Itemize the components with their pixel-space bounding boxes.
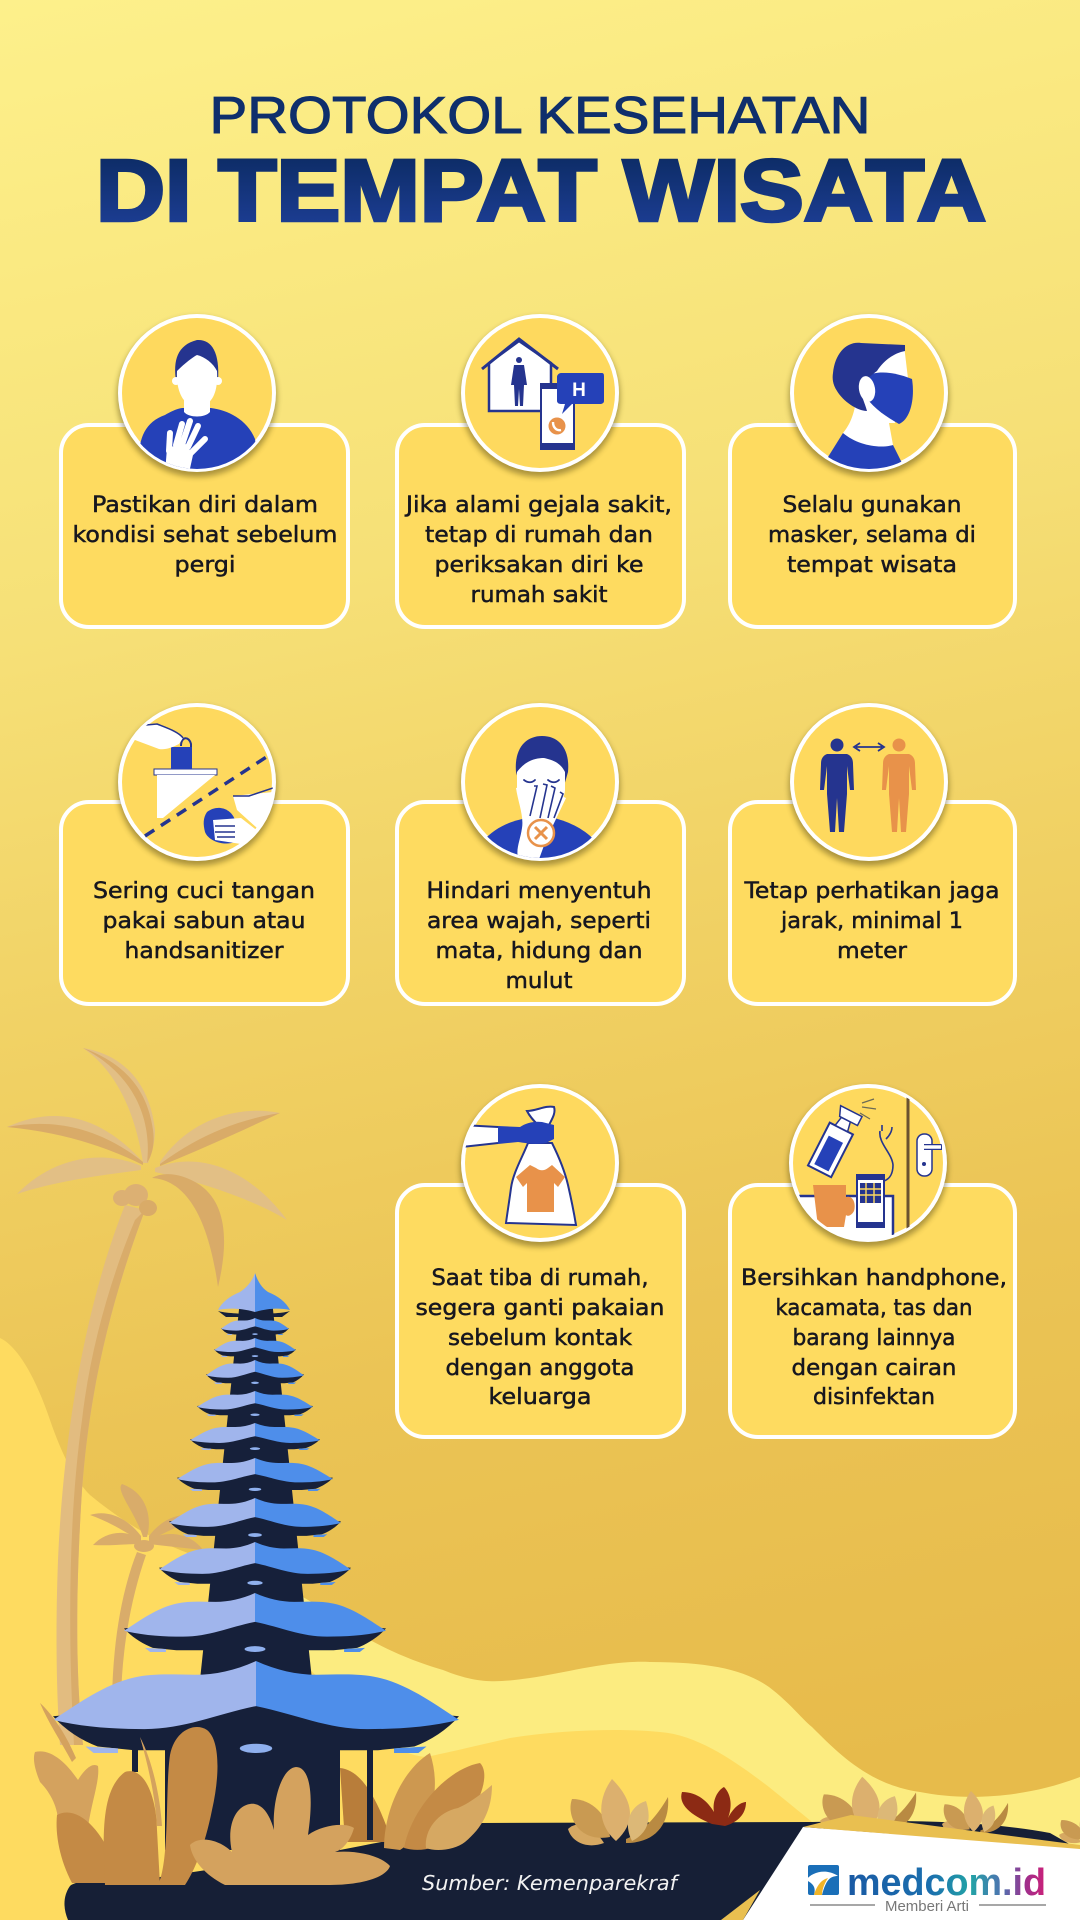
text: segera ganti pakaian [416,1296,664,1321]
small palm tree [90,1484,203,1700]
text: Saat tiba di rumah, [432,1266,648,1291]
icon: house, phone, hospital: H [572,380,586,401]
card [61,425,348,627]
icon: two people distance [789,703,949,866]
text: keluarga [488,1385,592,1410]
tagline: Memberi Arti [885,1898,969,1915]
card [397,425,684,627]
text: Selalu gunakan [782,493,962,518]
temple base [165,1745,340,1850]
text: tetap di rumah dan [425,523,653,548]
big palm tree [7,1048,287,1745]
panel: sehat [61,314,348,627]
text: pakai sabun atau [102,909,306,934]
card [397,1185,684,1437]
text: periksakan diri ke [434,553,644,578]
panel: disinfektan [730,1084,1015,1437]
source text: Sumber: Kemenparekraf [422,1871,680,1895]
text [404,493,672,608]
icon: clothes in bag [460,1084,620,1247]
card [730,802,1015,1004]
icon: head with mask [789,314,949,477]
text: disinfektan [813,1385,935,1410]
text: Sering cuci tangan [93,879,315,904]
logo icon [806,1865,839,1895]
ground and shrubs right [64,1753,1080,1920]
text: Pastikan diri dalam [92,493,318,518]
card [730,1185,1015,1437]
text: Jika alami gejala sakit, [404,493,672,518]
title [96,87,986,240]
text: kacamata, tas dan [776,1296,972,1321]
text [416,1266,664,1410]
text [743,879,1000,964]
panel: jaga jarak [730,703,1015,1004]
person orange [882,738,916,832]
icon: hand covering face [460,703,620,866]
logo wordmark: medcom.id [847,1862,1046,1904]
roof tiers [53,1273,459,1753]
icon: hand washing [117,703,277,866]
text: dengan cairan [792,1356,956,1381]
temple [53,1273,459,1850]
panel: cuci tangan [61,703,348,1004]
text: sebelum kontak [448,1326,632,1351]
icon: house, phone, hospital [460,314,620,477]
panel: masker [730,314,1015,627]
card [397,802,684,1004]
text: handsanitizer [124,939,285,964]
text: rumah sakit [470,583,608,608]
title line 1: PROTOKOL KESEHATAN [210,87,870,145]
text [426,879,652,994]
card [730,425,1015,627]
text: area wajah, seperti [427,909,651,934]
text: barang lainnya [792,1326,956,1351]
text: meter [837,939,908,964]
text: jarak, minimal 1 [780,909,963,934]
text: pergi [174,553,236,578]
person navy [820,738,854,832]
text: Tetap perhatikan jaga [743,879,1000,904]
arrow [854,743,884,751]
landscape hills [0,1338,1080,1920]
tower body [200,1300,312,1680]
card [61,802,348,1004]
title line 2: DI TEMPAT WISATA [96,142,986,240]
icon: man with hand on chest [117,314,277,477]
text [741,1266,1007,1410]
medcom logo [806,1862,1046,1915]
panel: ganti pakaian [397,1084,684,1437]
text [93,879,315,964]
text: Bersihkan handphone, [741,1266,1007,1291]
text: tempat wisata [787,553,957,578]
panel: gejala sakit [397,314,684,627]
panel: hindari menyentuh wajah [397,703,684,1004]
text: masker, selama di [768,523,976,548]
text [768,493,976,578]
text: kondisi sehat sebelum [72,523,338,548]
pillars [132,1745,373,1840]
icon: disinfecting objects [788,1084,948,1247]
text: Hindari menyentuh [426,879,652,904]
text: dengan anggota [446,1356,634,1381]
text: mulut [506,969,573,994]
foreground shrubs left [34,1703,390,1885]
text [72,493,338,578]
text: mata, hidung dan [436,939,642,964]
logo area white corner [721,1815,1080,1920]
